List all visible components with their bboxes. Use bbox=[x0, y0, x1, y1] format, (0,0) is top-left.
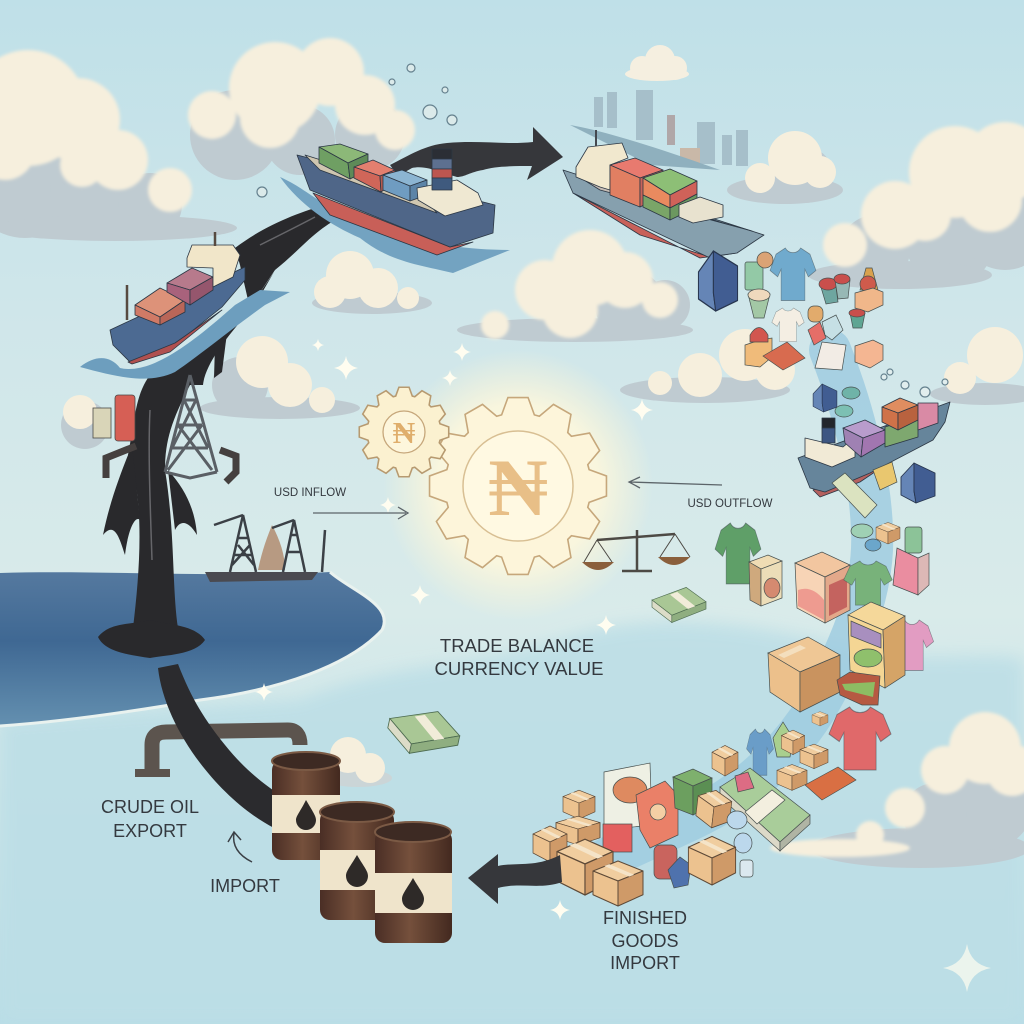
green box bbox=[673, 769, 712, 815]
white shirt bbox=[772, 308, 804, 342]
cloud: left middle bbox=[61, 336, 360, 449]
cash bottom centre bbox=[384, 702, 464, 763]
gems bbox=[842, 387, 860, 399]
derrick with oil grabbers bbox=[106, 375, 236, 482]
navy house bbox=[901, 463, 935, 503]
cloud: small centre left bbox=[312, 251, 432, 314]
right ship bbox=[798, 398, 950, 497]
glow behind currency gears bbox=[383, 350, 653, 620]
green shirt left bbox=[715, 523, 761, 584]
green shirt right bbox=[844, 561, 892, 605]
navy bag bbox=[698, 251, 738, 311]
left ship bbox=[110, 232, 245, 364]
label: USD outflow: USD OUTFLOW bbox=[688, 498, 773, 510]
watermark sparkle bbox=[943, 944, 991, 992]
red envelope bbox=[763, 342, 805, 370]
green pack and tan head bbox=[745, 262, 763, 290]
pink shirt bbox=[890, 620, 934, 670]
cloud: near barrels bbox=[324, 737, 392, 787]
label: trade balance: TRADE BALANCE bbox=[440, 635, 594, 656]
label: finished goods import: IMPORT bbox=[610, 953, 680, 973]
cloud: upper right bbox=[808, 122, 1024, 289]
barrel three bbox=[375, 822, 452, 943]
oil highlights bbox=[149, 217, 315, 560]
lower background band bbox=[0, 622, 1024, 1024]
small goods beside derrick bbox=[93, 395, 135, 441]
oil arrow to second ship bbox=[390, 127, 563, 180]
small goods bbox=[876, 522, 900, 544]
cash pack on ship bbox=[832, 473, 877, 518]
white bag bbox=[604, 763, 652, 830]
city skyline bbox=[570, 90, 748, 170]
navy house small bbox=[813, 384, 837, 412]
scales bbox=[582, 530, 690, 571]
left ship water bbox=[80, 290, 290, 379]
pipe bbox=[135, 730, 300, 773]
cloud: right middle bbox=[620, 327, 1024, 405]
gold pack bbox=[873, 462, 897, 490]
label: currency value: CURRENCY VALUE bbox=[435, 658, 603, 679]
label: crude oil export: CRUDE OIL bbox=[101, 797, 199, 817]
green pouch bbox=[837, 672, 880, 705]
bubbles above ship bbox=[257, 64, 457, 197]
right-top ship bbox=[563, 130, 764, 258]
white towel bbox=[815, 342, 846, 370]
label: finished goods import: FINISHED bbox=[603, 908, 687, 928]
large naira gear: ₦ bbox=[488, 442, 548, 533]
cash near scales bbox=[652, 587, 706, 622]
orange box with figure bbox=[860, 268, 878, 290]
label: crude oil export: EXPORT bbox=[113, 821, 187, 841]
top centre ship bbox=[297, 144, 495, 255]
oil stream lower to barrels bbox=[158, 664, 280, 828]
arrow: USD inflow bbox=[313, 507, 408, 519]
oil stream main column bbox=[98, 205, 335, 658]
cloud: small top right bbox=[625, 45, 689, 81]
arrow: import bbox=[228, 832, 252, 862]
sea bbox=[0, 572, 384, 726]
lower goods cluster bbox=[533, 712, 856, 906]
arrow to barrels bbox=[468, 854, 562, 904]
cash stack bbox=[720, 768, 810, 851]
envelope bbox=[805, 767, 856, 800]
pale goods stream bbox=[590, 350, 872, 868]
barrel one bbox=[272, 752, 340, 860]
label: import: IMPORT bbox=[210, 876, 280, 896]
sparkles bbox=[255, 339, 653, 920]
pink bag bbox=[893, 548, 929, 595]
oil drips bbox=[103, 445, 140, 555]
red shirt bbox=[829, 707, 891, 770]
oil puddle bbox=[98, 620, 205, 658]
offshore rigs and boats bbox=[205, 515, 325, 582]
bubbles right bbox=[881, 369, 948, 397]
small naira gear bbox=[359, 387, 449, 477]
top centre ship water bbox=[280, 177, 510, 273]
product box bbox=[749, 555, 782, 606]
upper goods cluster bbox=[698, 248, 883, 417]
blue shirt bbox=[770, 248, 816, 300]
cloud: centre bbox=[457, 230, 693, 342]
arrow: USD outflow bbox=[629, 477, 722, 488]
cloud: behind second ship bbox=[727, 131, 843, 204]
cloud: lower right bbox=[770, 712, 1024, 868]
middle goods cluster bbox=[715, 462, 935, 770]
large naira gear bbox=[430, 398, 606, 574]
small items bbox=[808, 306, 823, 322]
cloud: top centre bbox=[188, 38, 415, 180]
orange boxes bbox=[855, 340, 883, 368]
large box bbox=[768, 637, 840, 712]
bowls bbox=[748, 294, 770, 318]
tall product box bbox=[848, 602, 905, 688]
label: finished goods import: GOODS bbox=[611, 931, 679, 951]
shoreline foam bbox=[0, 572, 384, 726]
label: USD inflow: USD INFLOW bbox=[274, 487, 346, 499]
barrel two bbox=[320, 802, 394, 920]
cloud: top left bbox=[0, 50, 237, 241]
red carton bbox=[795, 552, 850, 623]
small naira gear: ₦ bbox=[393, 415, 416, 450]
green cup bbox=[850, 313, 865, 328]
red bag bbox=[636, 781, 678, 848]
